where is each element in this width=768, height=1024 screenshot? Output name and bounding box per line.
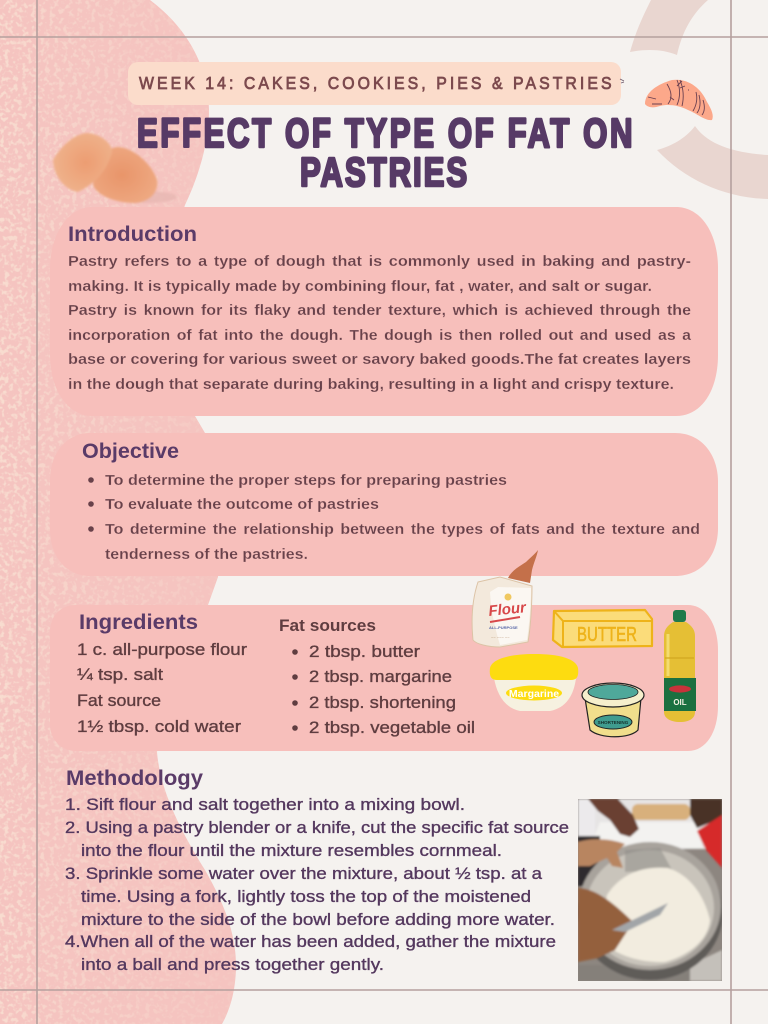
text block: introduction body [68,253,692,393]
list: objectives: To determine the proper steps for preparing pastries [105,472,507,489]
list: objectives [88,472,700,563]
background ring decoration [630,0,768,199]
text block: methodology steps [65,795,569,974]
list: fat sources: 2 tbsp. butter [309,642,420,661]
icon: shortening tub: SHORTENING [598,720,629,725]
text block: methodology steps: into the flour until the mixture resembles cornmeal. [81,841,502,860]
text block: methodology steps: into a ball and press together gently. [81,955,384,974]
title: PASTRIES [300,149,467,195]
icon: margarine tub: Margarine [509,688,559,700]
heading: objective: Objective [82,440,179,463]
icon: butter [553,610,652,647]
list: objectives: tenderness of the pastries. [105,546,308,563]
panel: ingredients [50,605,718,751]
list: ingredients: 1½ tbsp. cold water [77,717,241,736]
title: EFFECT OF TYPE OF FAT ON [137,110,633,156]
text block: introduction body: Pastry is known for its flaky and tender texture, which is achieved through the [68,302,691,319]
list: ingredients: ¼ tsp. salt [77,665,163,684]
text block: methodology steps: 4.When all of the water has been added, gather the mixture [65,932,556,951]
icon: sparkle [620,79,624,83]
list: objectives: To evaluate the outcome of pastries [105,496,379,513]
list: objectives: To determine the relationship between the types of fats and the texture and [105,521,700,538]
text block: methodology steps: 1. Sift flour and salt together into a mixing bowl. [65,795,465,814]
text block: introduction body: in the dough that separate during baking, resulting in a light and crispy texture. [68,376,674,393]
icon: croissant [645,80,713,120]
list: fat sources: 2 tbsp. margarine [309,667,452,686]
text block: methodology steps: 2. Using a pastry blender or a knife, cut the specific fat source [65,818,569,837]
week label pill: WEEK 14: CAKES, COOKIES, PIES & PASTRIES [139,73,612,93]
icon: flour bag [472,550,538,647]
heading: introduction: Introduction [68,223,197,246]
week label pill [128,62,621,105]
text block: introduction body: incorporation of fat into the dough. The dough is then rolled out and used as a [68,327,692,344]
panel: objective [50,433,718,576]
icon: oil bottle [664,610,696,722]
text block: methodology steps: 3. Sprinkle some water over the mixture, about ½ tsp. at a [65,864,543,883]
text block: introduction body: base or covering for various sweet or savory baked goods.The fat creates layers [68,351,691,368]
icon: oil bottle: OIL [673,698,687,707]
list: fat sources [292,642,475,737]
photo: mixing flour and fat in a bowl [577,799,723,981]
icon: flour bag: Flour [488,599,528,620]
icon: margarine tub [490,654,578,711]
panel: introduction [50,207,718,416]
list: fat sources: 2 tbsp. vegetable oil [309,718,475,737]
text block: introduction body: making. It is typically made by combining flour, fat , water, and salt or sugar. [68,278,652,295]
icon: shortening tub [582,683,644,737]
list: ingredients [77,640,247,736]
heading: fat sources: Fat sources [279,616,376,635]
icon: butter: BUTTER [577,624,637,646]
list: ingredients: Fat source [77,691,161,710]
icon: bread rolls [53,133,177,203]
icon: flour bag: ~~ ~~~ ~~ [491,635,510,640]
title [137,110,633,195]
text block: methodology steps: mixture to the side of the bowl before adding more water. [81,910,555,929]
list: ingredients: 1 c. all-purpose flour [77,640,247,659]
heading: methodology: Methodology [66,767,203,790]
heading: ingredients: Ingredients [79,611,198,634]
list: fat sources: 2 tbsp. shortening [309,693,456,712]
text block: introduction body: Pastry refers to a type of dough that is commonly used in baking and pastry- [68,253,691,270]
icon: flour bag: ALL-PURPOSE [489,625,518,630]
text block: methodology steps: time. Using a fork, lightly toss the top of the moistened [81,887,531,906]
background pink blob [0,0,240,1024]
